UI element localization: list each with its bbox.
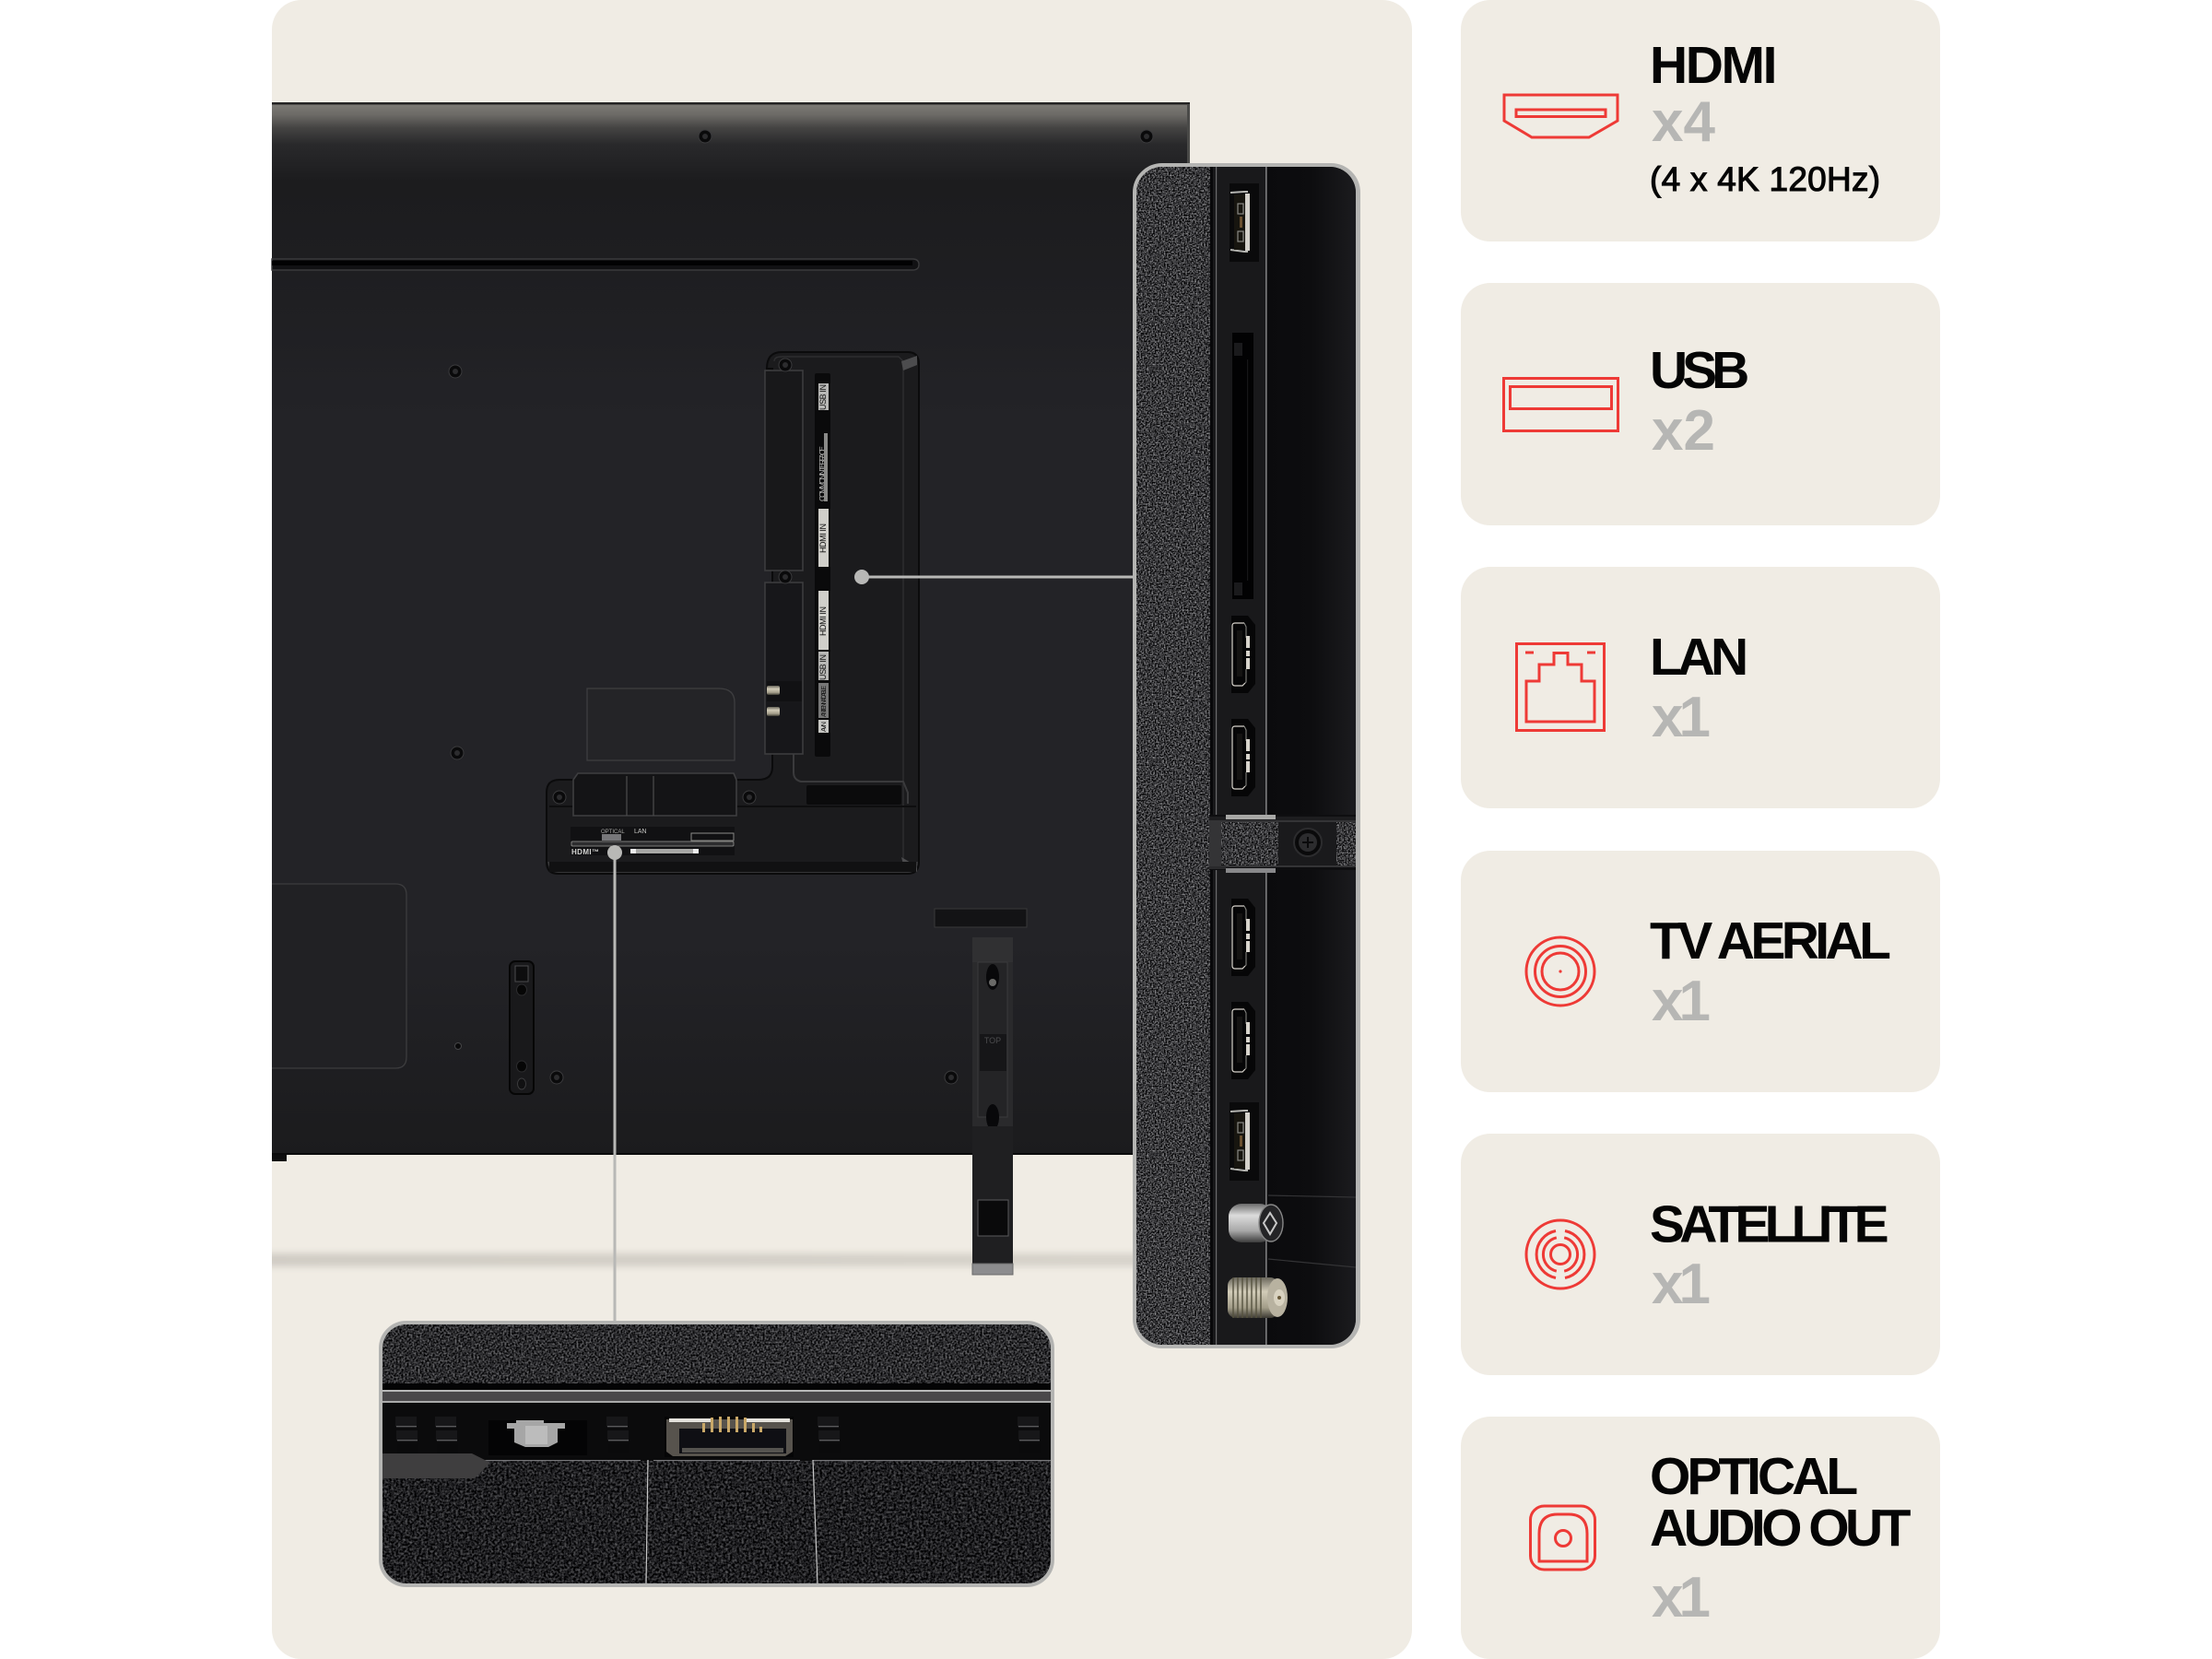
small bracket xyxy=(510,961,534,1094)
bottom-left foot xyxy=(272,1155,287,1161)
port label strip: HDMI IN xyxy=(818,524,828,553)
port label strip: USB IN xyxy=(818,384,828,410)
port: TV aerial socket xyxy=(1229,1204,1283,1242)
cable channel xyxy=(794,754,908,804)
panel joint with screw xyxy=(1209,815,1356,873)
callout: bottom ports close-up xyxy=(381,1323,1053,1585)
lower label strip xyxy=(571,827,735,856)
black slab xyxy=(806,785,901,805)
wall stand bracket xyxy=(935,909,1027,1275)
card: TV aerial xyxy=(1461,851,1940,1092)
card: optical audio out xyxy=(1461,1417,1940,1659)
LAN count: x1 xyxy=(1652,686,1709,749)
port: HDMI 3 xyxy=(1231,899,1255,976)
USB label: USB xyxy=(1650,341,1747,400)
connector bay bracket xyxy=(547,352,919,874)
lower label strip: LAN xyxy=(634,829,647,835)
port label strip xyxy=(815,373,830,757)
textured wedge xyxy=(382,1453,490,1478)
icon: USB port xyxy=(1504,378,1618,431)
HDMI label: HDMI xyxy=(1650,36,1775,95)
card: satellite xyxy=(1461,1134,1940,1375)
left recessed panel xyxy=(272,884,406,1068)
port label strip: USB IN xyxy=(818,654,828,680)
USB count: x2 xyxy=(1652,399,1715,463)
port label strip: HDMI IN xyxy=(818,606,828,636)
top slab xyxy=(935,909,1027,927)
floor shadow xyxy=(258,1253,1143,1266)
optical label: OPTICAL xyxy=(1650,1447,1857,1506)
seam lines near antenna ports xyxy=(1268,1195,1356,1197)
HDMI count: x4 xyxy=(1652,90,1715,154)
card: USB xyxy=(1461,283,1940,525)
audio out label: AUDIO OUT xyxy=(1650,1499,1912,1558)
port: common interface slot xyxy=(1232,333,1253,599)
port: HDMI 1 xyxy=(1231,616,1255,693)
icon: satellite socket xyxy=(1526,1220,1594,1288)
lower label strip: OPTICAL xyxy=(601,830,625,835)
cover: upper xyxy=(765,371,803,571)
port label strip: ANTENNA/CABLE xyxy=(821,686,828,717)
top mounting slot xyxy=(272,259,919,270)
TV aerial count: x1 xyxy=(1652,970,1709,1033)
port label strip: AV IN xyxy=(821,722,828,732)
icon: optical socket xyxy=(1530,1506,1594,1570)
port: LAN xyxy=(665,1417,794,1457)
satellite label: SATELLITE xyxy=(1650,1194,1888,1253)
port label strip: COMMON INTERFACE xyxy=(818,446,827,501)
optical count: x1 xyxy=(1652,1566,1709,1630)
leader line: rear connector panel xyxy=(854,570,1135,584)
port: USB top xyxy=(1230,183,1259,262)
LAN label: LAN xyxy=(1650,628,1746,687)
leader line: bottom connector panel xyxy=(607,845,622,1324)
TV aerial label: TV AERIAL xyxy=(1650,912,1890,971)
connector stubs xyxy=(767,686,780,716)
lower textured panel xyxy=(382,1460,1051,1583)
port: HDMI 4 xyxy=(1231,1002,1255,1079)
icon: LAN port xyxy=(1517,643,1604,730)
icon: HDMI port xyxy=(1504,95,1618,137)
panel: TV rear view background xyxy=(272,0,1412,1659)
vents xyxy=(395,1417,1040,1441)
port panel xyxy=(1213,167,1266,1345)
lower label strip: HDMI™ xyxy=(571,848,599,856)
TV rear body xyxy=(272,102,1190,1161)
satellite count: x1 xyxy=(1652,1253,1709,1316)
callout: side ports close-up xyxy=(1135,165,1359,1347)
port: USB bottom xyxy=(1230,1102,1259,1181)
cover: lower xyxy=(765,582,803,754)
lower connector cover xyxy=(573,773,736,816)
screw holes xyxy=(449,130,1153,1084)
card: LAN xyxy=(1461,567,1940,808)
port: satellite F socket xyxy=(1228,1277,1288,1318)
port: HDMI 2 xyxy=(1231,719,1255,796)
icon: aerial socket xyxy=(1526,937,1594,1006)
card: HDMI xyxy=(1461,0,1940,241)
port: optical audio xyxy=(507,1420,565,1447)
wall stand bracket: TOP xyxy=(984,1036,1001,1045)
recessed label plate xyxy=(587,688,735,760)
HDMI resolution note: (4 x 4K 120Hz) xyxy=(1650,160,1880,198)
